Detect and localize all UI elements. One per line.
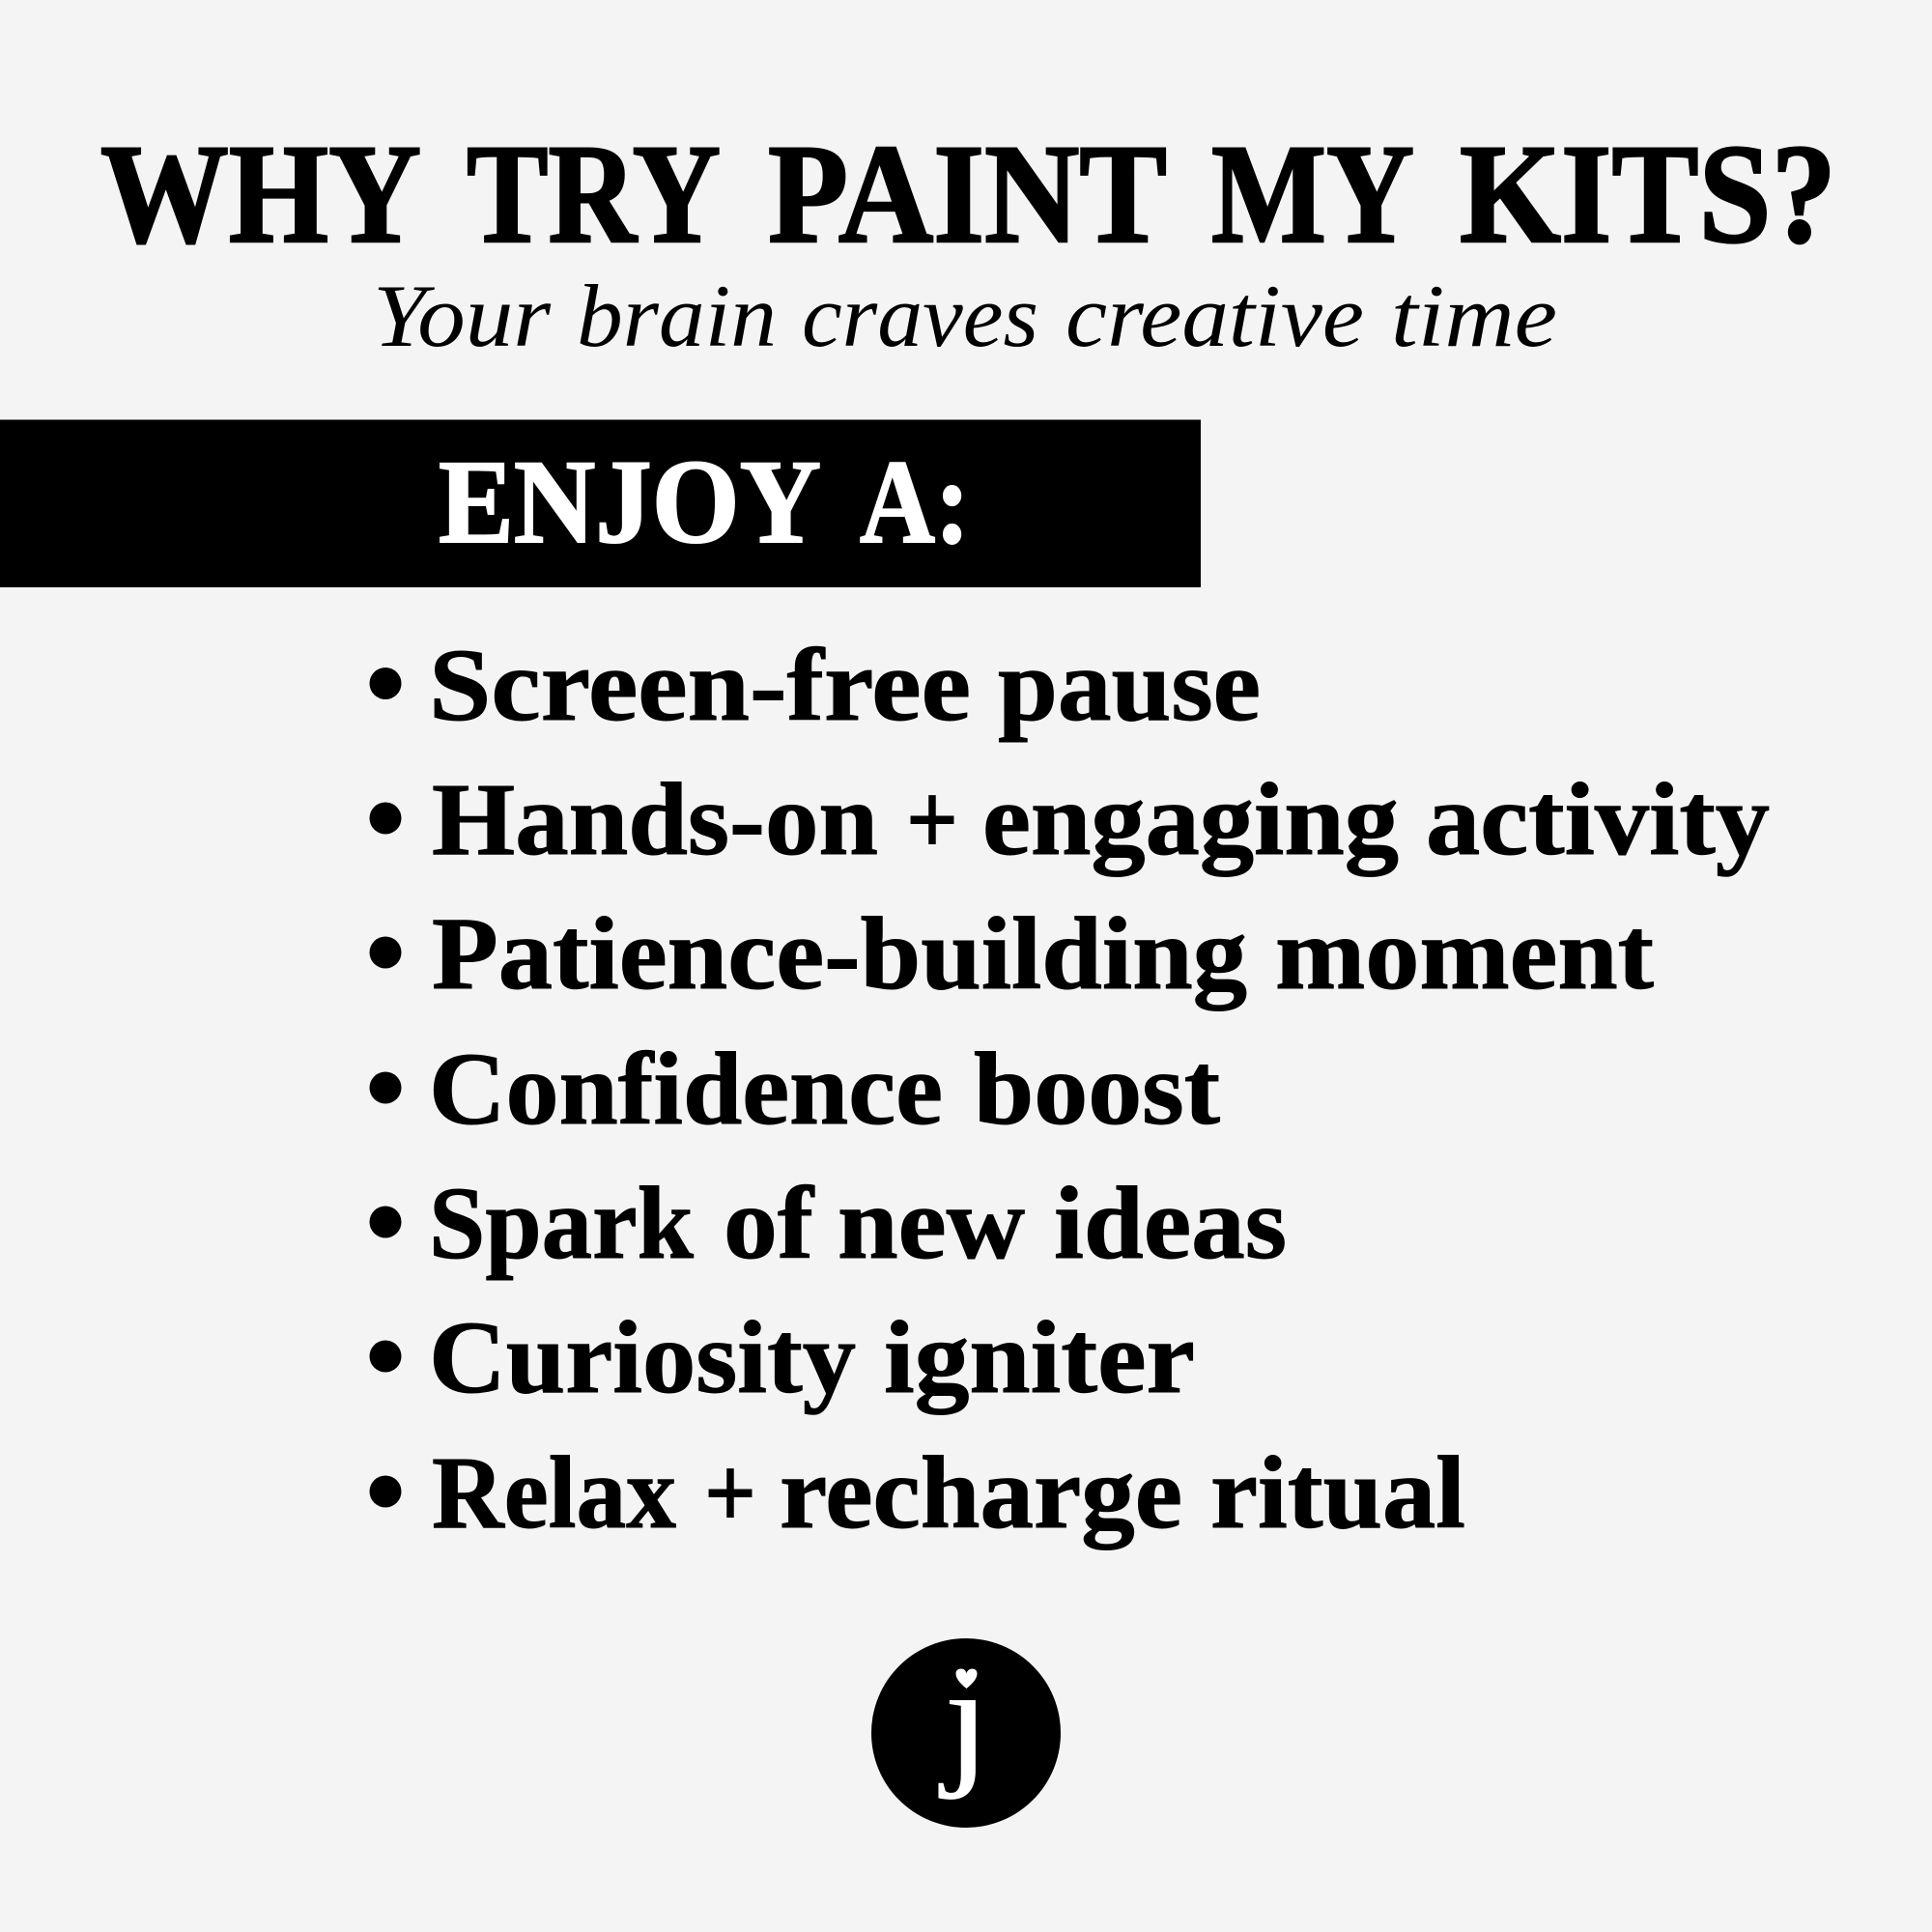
title: WHY (100, 115, 421, 272)
list item: patience-building: moment (1275, 897, 1654, 1011)
list item: screen-free pause: pause (998, 629, 1261, 743)
title: MY (1211, 115, 1414, 272)
subtitle: brain (577, 267, 777, 365)
icon: j heart logo (871, 1637, 1061, 1828)
list item: spark of new ideas (369, 1167, 1287, 1281)
list item: patience-building: Patience-building (432, 897, 1247, 1011)
list item: spark of new ideas: Spark (429, 1167, 694, 1281)
list item: spark of new ideas: new (838, 1167, 1025, 1281)
benefits list (369, 629, 1770, 1550)
list item: hands-on: engaging (982, 763, 1399, 877)
list item: patience-building (369, 897, 1654, 1011)
list item: spark of new ideas: ideas (1054, 1167, 1287, 1281)
list item: hands-on: activity (1426, 763, 1770, 877)
subtitle: craves (802, 267, 1038, 365)
list item: confidence boost: boost (974, 1033, 1220, 1147)
list item: relax + recharge (369, 1436, 1465, 1550)
list item: relax + recharge: Relax (432, 1436, 676, 1550)
list item: hands-on: + (906, 763, 958, 877)
title: TRY (467, 115, 721, 272)
list item: curiosity igniter (369, 1301, 1195, 1415)
list item: screen-free pause (369, 629, 1261, 743)
list item: curiosity igniter: igniter (884, 1301, 1195, 1415)
subtitle: creative (1065, 267, 1364, 365)
list item: relax + recharge: ritual (1210, 1436, 1465, 1550)
list item: spark of new ideas: of (724, 1167, 814, 1281)
list item: confidence boost: Confidence (429, 1033, 943, 1147)
banner: enjoy a (0, 419, 1201, 587)
list item: hands-on: Hands-on (432, 763, 878, 877)
list item: hands-on (369, 763, 1770, 877)
list item: curiosity igniter: Curiosity (429, 1301, 856, 1415)
list item: confidence boost (369, 1033, 1220, 1147)
subtitle: Your (373, 267, 552, 365)
list item: screen-free pause: Screen-free (429, 629, 971, 743)
icon: j heart logo: j (938, 1637, 990, 1800)
title (100, 115, 1836, 272)
banner heading: A: (860, 436, 970, 568)
banner heading: ENJOY (439, 436, 821, 568)
subtitle: time (1391, 267, 1557, 365)
title: PAINT (768, 115, 1167, 272)
title: KITS? (1460, 115, 1836, 272)
list item: relax + recharge: + (704, 1436, 756, 1550)
subtitle (373, 267, 1557, 365)
list item: relax + recharge: recharge (780, 1436, 1182, 1550)
